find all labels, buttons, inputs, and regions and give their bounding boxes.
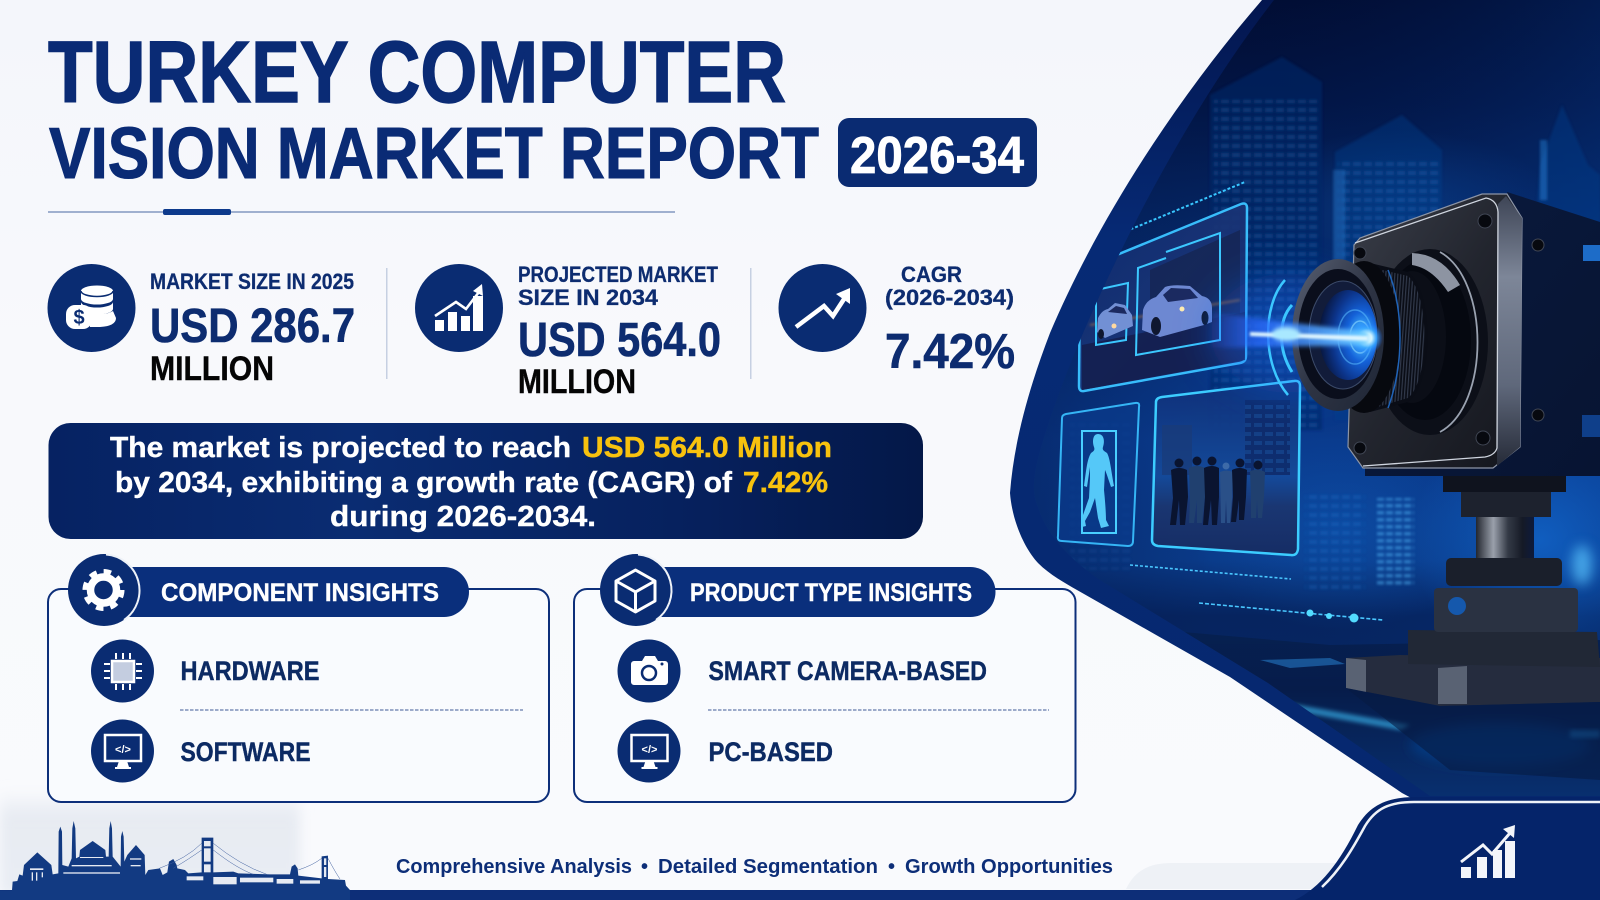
item: software (91, 720, 310, 782)
item: hardware (91, 640, 320, 702)
unit: MILLION (150, 350, 274, 388)
icon: box (600, 554, 672, 626)
item: pc-based: PC-BASED (708, 737, 833, 767)
screws (1354, 214, 1544, 454)
holographic rings and light beam (1210, 273, 1370, 395)
hero image panel: machine vision camera over a city (1000, 0, 1600, 800)
city buildings (1070, 57, 1600, 590)
icon: camera (618, 640, 680, 702)
stat: CAGR (778, 262, 1015, 379)
lens mount ring (1389, 249, 1488, 435)
icon: code monitor: </> (115, 744, 131, 756)
bounding box: large car (1136, 233, 1220, 355)
label: MARKET SIZE IN 2025 (150, 269, 354, 294)
summary text: by 2034, exhibiting a growth rate (CAGR) of (115, 467, 732, 499)
label (885, 262, 1014, 310)
footer corner panel (1295, 797, 1600, 900)
value: USD 564.0 (518, 314, 721, 367)
light beam (1205, 312, 1368, 348)
camera mount and base (1346, 473, 1600, 780)
title (48, 24, 819, 194)
panel header (640, 567, 996, 617)
title line 1: TURKEY COMPUTER (48, 24, 786, 121)
stat: market size 2025 (48, 264, 355, 388)
unit: MILLION (518, 363, 636, 401)
data trace lines (1130, 565, 1383, 622)
summary banner (48, 423, 923, 539)
item: smart camera-based (618, 640, 987, 702)
footer tagline: • (641, 856, 648, 878)
panel header (110, 567, 469, 617)
icon: bar chart with arrow (415, 264, 503, 352)
camera body (1292, 192, 1600, 476)
car: large (1142, 285, 1212, 337)
year badge: 2026-34 (850, 127, 1024, 185)
value: 7.42% (885, 325, 1015, 379)
footer tagline: Detailed Segmentation (658, 856, 878, 878)
HUD panel: vehicle detection (1079, 182, 1247, 391)
panel: product type insights (574, 554, 1076, 802)
icon: chip (91, 640, 154, 702)
hero navy frame (1010, 0, 1600, 800)
icon: growth chart (1461, 825, 1515, 878)
bounding box: small car (1096, 283, 1128, 345)
footer tagline: Growth Opportunities (905, 856, 1113, 878)
reflective floor (1160, 630, 1600, 800)
label: PROJECTED MARKET (518, 262, 718, 287)
stat separator (750, 268, 752, 379)
item: smart camera-based: SMART CAMERA-BASED (708, 656, 987, 686)
footer tagline: • (888, 856, 895, 878)
item: pc-based (618, 720, 833, 782)
lens barrel (1378, 271, 1446, 403)
summary text: 7.42% (743, 467, 828, 499)
item: hardware: HARDWARE (180, 656, 320, 686)
person silhouette (1082, 434, 1114, 528)
title divider (48, 209, 675, 215)
istanbul skyline silhouette (0, 821, 350, 900)
summary text: The market is projected to reach (110, 432, 571, 464)
footer tagline: Comprehensive Analysis (396, 856, 632, 878)
label: SIZE IN 2034 (518, 285, 659, 310)
value: USD 286.7 (150, 300, 355, 353)
panel header: COMPONENT INSIGHTS (161, 579, 439, 607)
label (518, 262, 718, 310)
footer bar (0, 890, 1600, 900)
panel header: PRODUCT TYPE INSIGHTS (690, 579, 972, 607)
summary text (110, 432, 832, 533)
bridge cables (159, 843, 340, 879)
lens front element (1292, 259, 1384, 411)
title line 2: VISION MARKET REPORT (49, 114, 819, 194)
stat: projected market size 2034 (415, 262, 721, 401)
icon: code monitor (91, 720, 154, 782)
summary text: during 2026-2034. (330, 501, 596, 533)
label: CAGR (901, 262, 962, 287)
bottom haze (0, 790, 300, 895)
icon: gear (68, 554, 140, 626)
car: small (1097, 303, 1133, 339)
people group (1170, 456, 1265, 525)
footer tagline (396, 856, 1113, 878)
summary text: USD 564.0 Million (582, 432, 832, 464)
stat separator (386, 268, 388, 379)
label: (2026-2034) (885, 285, 1014, 310)
footer swoosh shade (1126, 863, 1345, 889)
hero scene (1056, 0, 1600, 780)
panel: component insights (48, 554, 549, 802)
icon: coin stack (48, 264, 136, 352)
HUD panel: person detection (1058, 403, 1139, 546)
icon: code monitor (618, 720, 680, 782)
icon: coin stack: $ (73, 307, 85, 329)
icon: rising trend arrow (778, 264, 866, 352)
item: software: SOFTWARE (180, 737, 310, 767)
icon: code monitor: </> (642, 744, 657, 756)
HUD panel: crowd detection (1152, 381, 1300, 555)
